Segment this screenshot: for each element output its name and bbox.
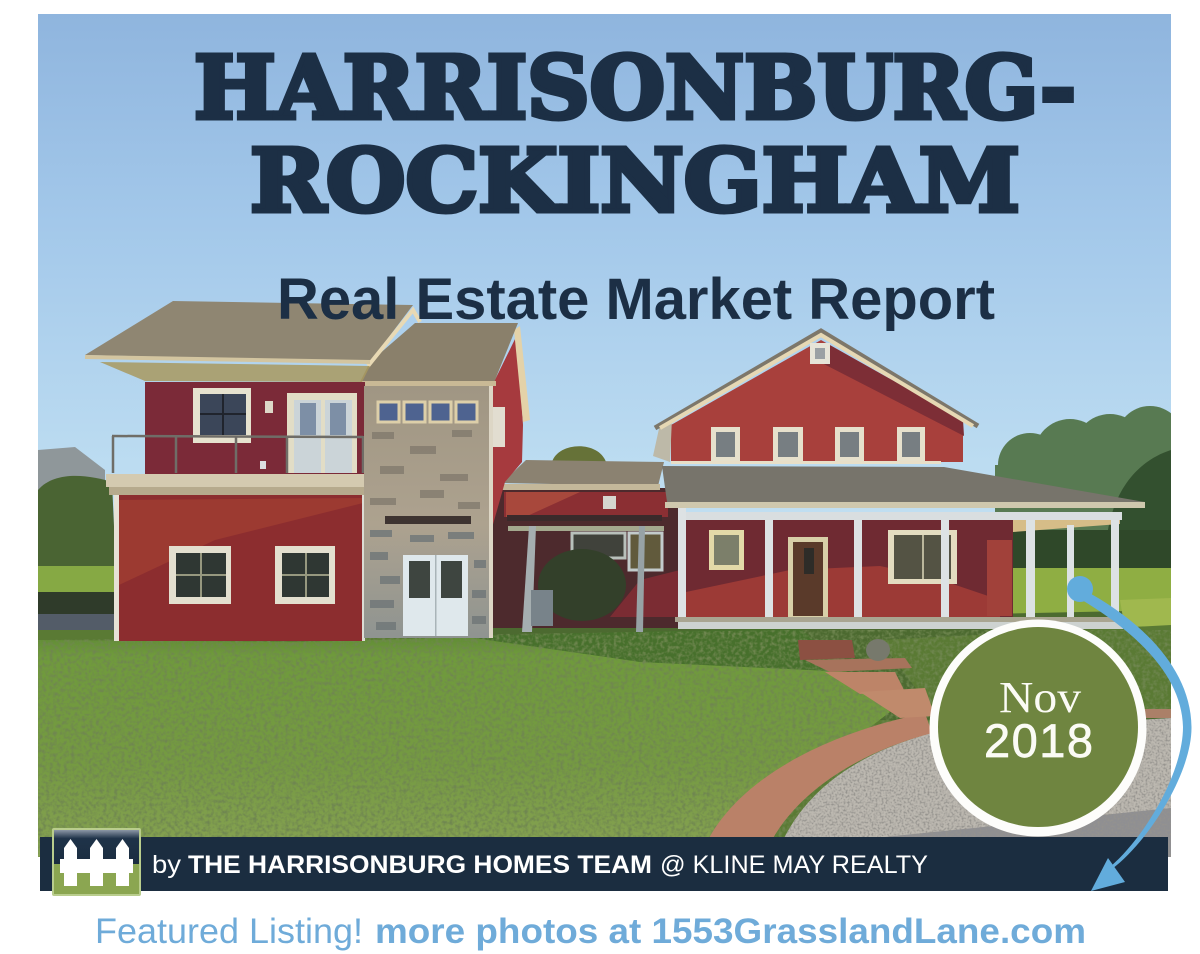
building: stone tower: [364, 386, 493, 638]
building: right gabled wing: [653, 331, 978, 464]
caption: featured listing: more photos at 1553GrasslandLane.com: [375, 912, 1086, 951]
title: [194, 38, 1076, 232]
porch soffit and roof: [1013, 520, 1120, 532]
author bar: [40, 837, 1168, 891]
sky: [38, 14, 1171, 524]
right red side wall: [493, 339, 523, 524]
foreground lawn: [38, 625, 1171, 857]
lower storey wall: [114, 495, 364, 641]
porch columns: [678, 508, 1119, 626]
arrow: from listing to caption: [1067, 576, 1192, 891]
caption: featured listing: Featured Listing!: [95, 912, 363, 951]
building: connector wing: [490, 460, 680, 632]
title line 2: ROCKINGHAM: [250, 131, 1020, 232]
brick path and steps: [708, 639, 1171, 840]
balcony railing: [112, 436, 363, 473]
porch deck: [675, 617, 1120, 622]
date month: Nov: [999, 673, 1081, 722]
byline: @ KLINE MAY REALTY: [660, 851, 928, 879]
gravel drive: [770, 716, 1171, 857]
date year: 2018: [984, 714, 1093, 767]
upper storey wall: [145, 382, 365, 474]
byline: by: [152, 851, 182, 879]
badge: date seal: [930, 620, 1146, 836]
building: wrap-around porch: [662, 466, 1145, 629]
byline: THE HARRISONBURG HOMES TEAM: [188, 851, 652, 879]
main roof: [85, 301, 413, 362]
porch wall: [680, 518, 1013, 618]
balcony slab: [106, 474, 367, 487]
mid-ground lawn: [38, 566, 1171, 857]
building: left wing: [85, 301, 530, 641]
icon: picket fence logo: [52, 828, 141, 896]
porch openings: [709, 530, 744, 570]
subtitle: Real Estate Market Report: [277, 267, 995, 332]
distant trees and neighbouring house: [38, 406, 1184, 570]
title line 1: HARRISONBURG-: [194, 38, 1076, 139]
